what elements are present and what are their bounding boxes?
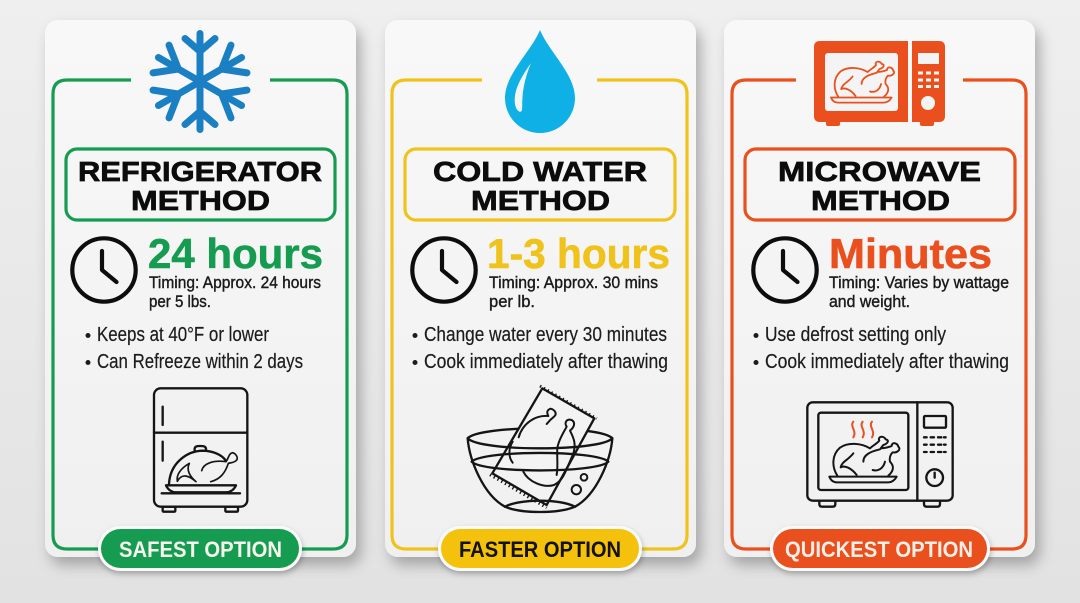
panel: cold water method <box>385 20 696 571</box>
bullet list: Can Refreeze within 2 days <box>97 351 303 373</box>
timing note <box>149 273 321 311</box>
icon: refrigerator with covered turkey <box>154 388 247 512</box>
icon: clock <box>72 238 136 302</box>
bullet list: Cook immediately after thawing <box>765 351 1009 373</box>
time estimate: minutes: Minutes <box>829 230 992 277</box>
bullet list: Use defrost setting only <box>765 324 946 346</box>
timing note: Timing: Approx. 30 mins <box>489 273 658 292</box>
heading: cold water method: METHOD <box>471 185 610 216</box>
badge: quickest option: QUICKEST OPTION <box>785 537 973 562</box>
icon: clock <box>753 238 817 302</box>
heading: refrigerator method <box>66 149 335 220</box>
timing note: Timing: Approx. 24 hours <box>149 273 321 292</box>
time estimate: 1-3 hours: 1-3 hours <box>487 230 670 277</box>
bullet list <box>412 324 668 373</box>
heading: microwave method: METHOD <box>811 185 950 216</box>
icon: water drop <box>505 30 575 133</box>
heading: cold water method <box>405 149 675 220</box>
icon: snowflake <box>150 34 250 130</box>
panel: refrigerator method <box>45 20 356 571</box>
badge: safest option <box>98 526 302 571</box>
timing note: per lb. <box>489 292 535 311</box>
icon: clock <box>412 238 476 302</box>
timing note <box>829 273 1009 311</box>
timing note: and weight. <box>829 292 910 311</box>
bullet list <box>86 324 303 373</box>
bullet list <box>754 324 1009 373</box>
panel: microwave method <box>724 20 1035 571</box>
badge: faster option: FASTER OPTION <box>459 537 621 562</box>
timing note: Timing: Varies by wattage <box>829 273 1009 292</box>
heading: cold water method: COLD WATER <box>433 156 647 187</box>
badge: safest option: SAFEST OPTION <box>119 537 282 562</box>
bullet list: Cook immediately after thawing <box>424 351 668 373</box>
heading: microwave method <box>745 149 1015 220</box>
bullet list: Change water every 30 minutes <box>424 324 667 346</box>
timing note: per 5 lbs. <box>149 292 211 311</box>
heading: refrigerator method: METHOD <box>131 185 270 216</box>
timing note <box>489 273 658 311</box>
time estimate: 24 hours: 24 hours <box>148 230 323 277</box>
icon: turkey bag in bowl of water <box>468 386 612 512</box>
heading: refrigerator method: REFRIGERATOR <box>78 156 322 187</box>
icon: microwave with turkey and steam <box>807 402 953 507</box>
icon: microwave (orange) <box>814 41 945 126</box>
badge: faster option <box>438 526 642 571</box>
bullet list: Keeps at 40°F or lower <box>97 324 269 346</box>
badge: quickest option <box>770 526 990 571</box>
heading: microwave method: MICROWAVE <box>778 156 981 187</box>
